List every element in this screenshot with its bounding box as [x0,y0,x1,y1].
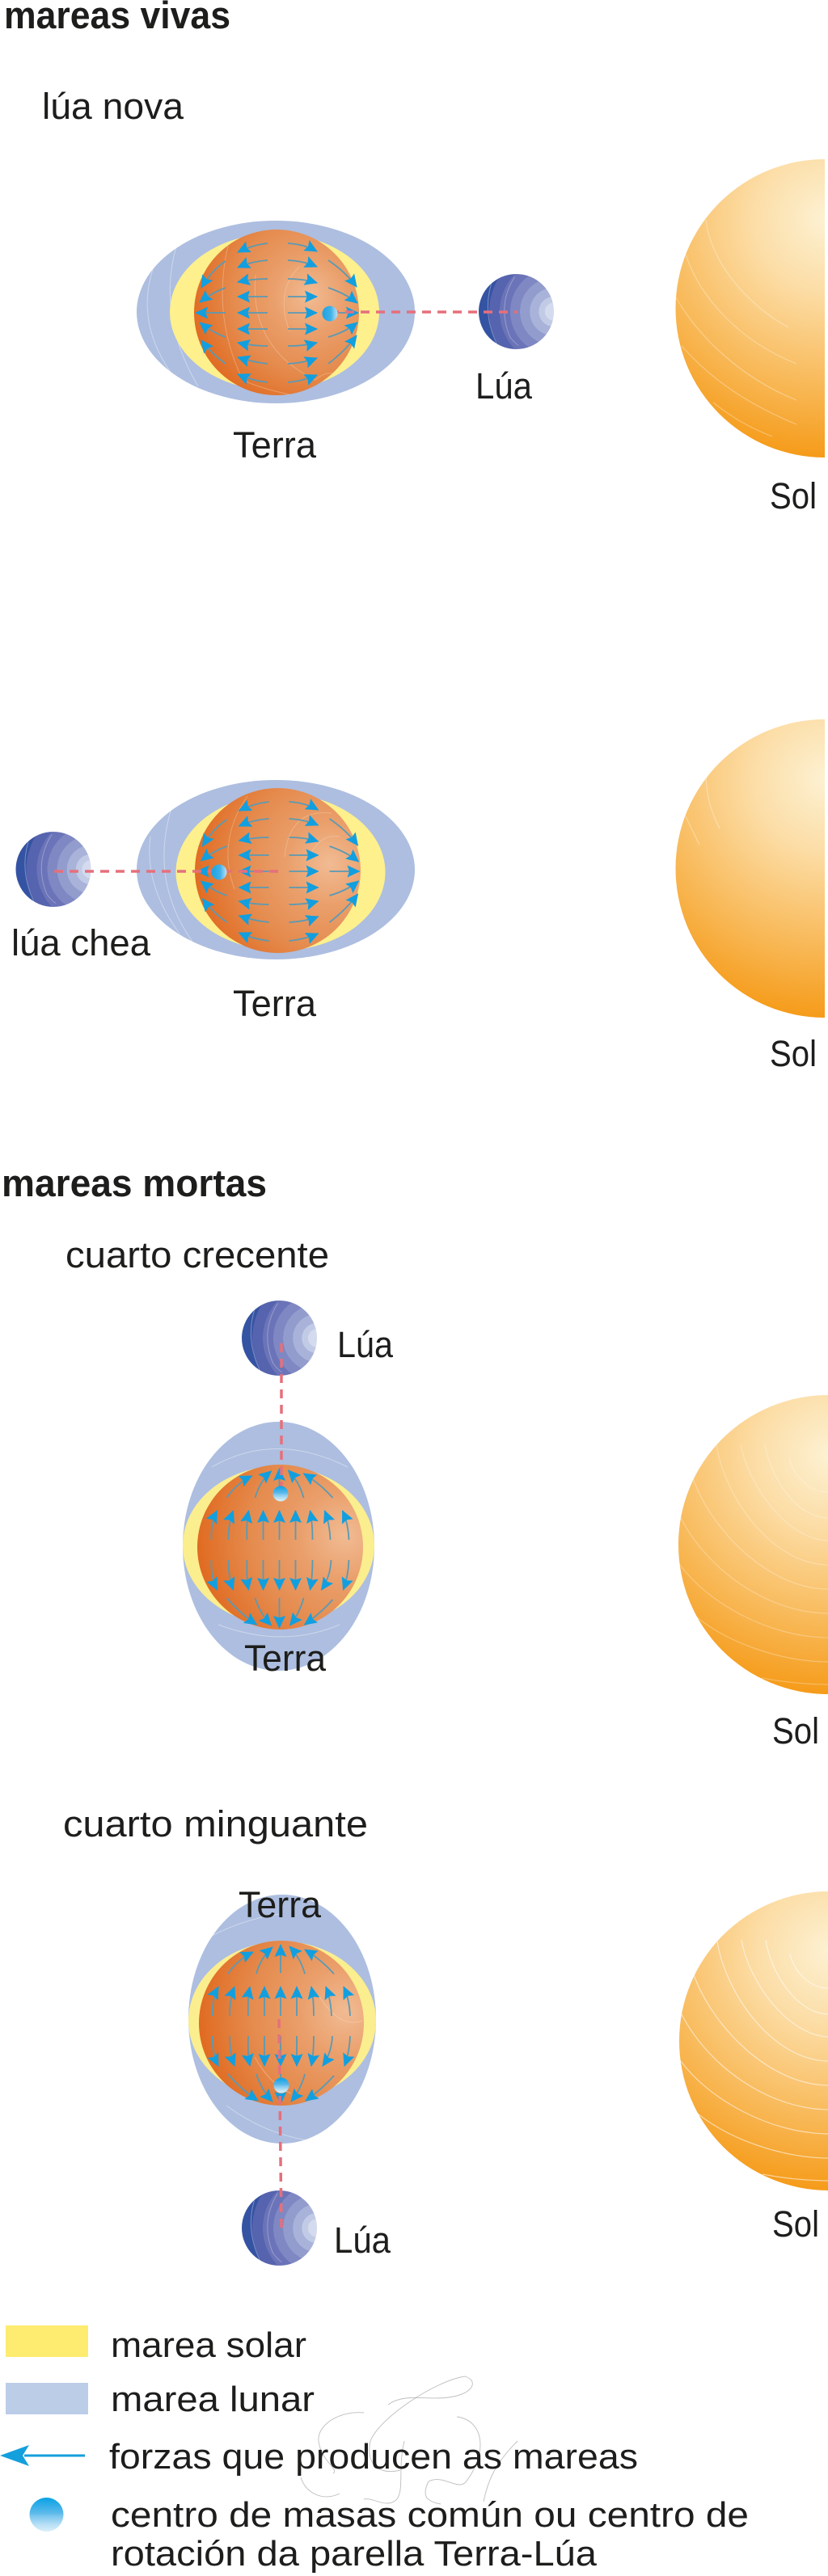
legend: arrow icon [0,2445,85,2466]
label: Lúa: Lúa [475,365,533,407]
legend: marea solar swatch [6,2325,88,2357]
legend: marea lunar swatch [6,2383,88,2414]
Sun [678,1395,828,1694]
label: Terra: Terra [239,1884,322,1925]
label: Sol: Sol [772,2203,819,2245]
Earth-Moon axis [54,870,280,873]
centre of mass [273,2077,289,2093]
heading: mareas mortas: mareas mortas [2,1162,267,1204]
label: lúa chea: lúa chea [11,922,151,963]
Moon [242,2190,317,2266]
Moon [16,832,91,907]
legend: centre of mass label [111,2495,749,2574]
panel: cuarto minguante diagram [188,1884,828,2266]
label: Sol: Sol [772,1710,819,1752]
heading: cuarto crecente: cuarto crecente [65,1234,329,1275]
panel: lúa nova diagram [137,159,828,516]
Sun [676,719,828,1018]
legend: watermark scribble [301,2376,518,2504]
centre of mass [212,865,226,879]
Earth with tides [137,221,415,403]
legend: centre of mass icon [29,2498,63,2532]
Earth with tides [137,780,415,959]
heading: lúa nova: lúa nova [42,86,184,127]
legend: centre of mass label: centro de masas común ou centro de [111,2495,749,2535]
legend: marea solar label: marea solar [111,2325,306,2365]
label: Terra: Terra [233,983,317,1024]
label: Lúa: Lúa [337,1324,394,1365]
label: Sol: Sol [770,1033,817,1074]
panel: lúa chea diagram [11,719,828,1074]
label: Terra: Terra [244,1638,327,1679]
heading: cuarto minguante: cuarto minguante [63,1803,368,1845]
legend: marea lunar label: marea lunar [111,2380,315,2419]
label: Lúa: Lúa [334,2220,391,2261]
legend: centre of mass label: rotación da parella Terra-Lúa [111,2534,598,2574]
Moon [479,274,554,349]
legend [0,2325,749,2574]
Earth-Moon axis [330,310,518,314]
label: Sol: Sol [770,475,817,516]
label: Terra: Terra [233,424,317,466]
Earth with tides [188,1895,376,2144]
Earth-Moon axis [279,2019,281,2228]
panel: cuarto crecente diagram [183,1301,828,1752]
centre of mass [273,1486,288,1502]
Sun [676,159,828,457]
Earth with tides [183,1422,374,1671]
legend: forces label: forzas que producen as mareas [109,2437,638,2477]
centre of mass [322,306,338,322]
Sun [679,1891,828,2190]
Earth-Moon axis [280,1343,283,1493]
Moon [242,1301,317,1376]
